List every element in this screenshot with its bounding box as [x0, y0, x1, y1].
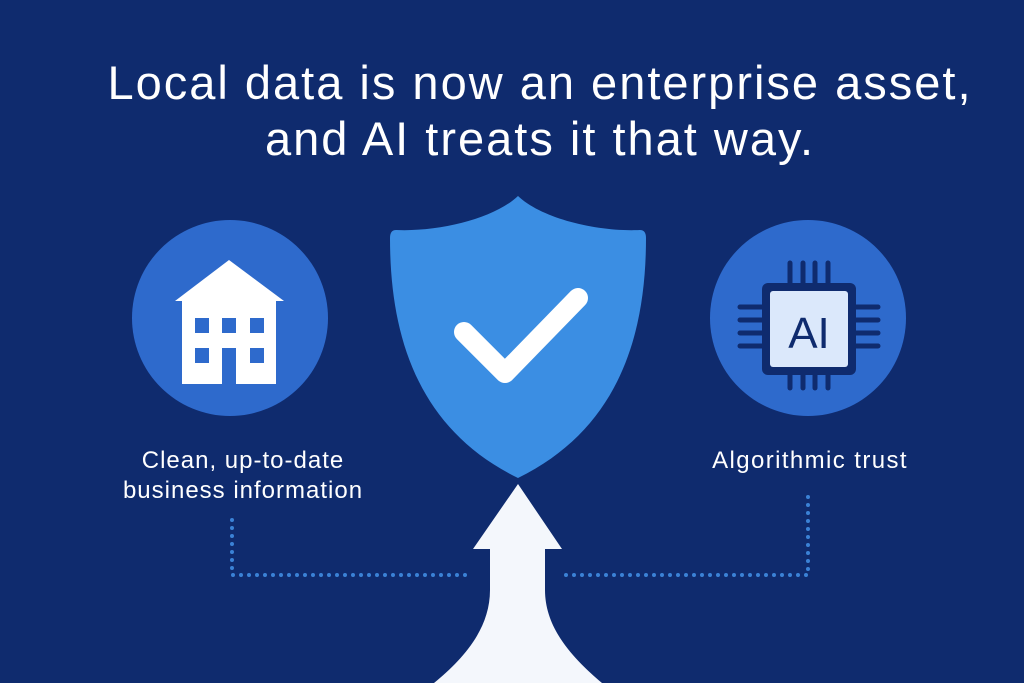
- label: clean business info: business information: [123, 477, 363, 504]
- title: [107, 56, 973, 165]
- dotted connector left: [232, 520, 466, 575]
- icon: shield with checkmark: [390, 196, 646, 478]
- title: Local data is now an enterprise asset,: [107, 56, 973, 109]
- arrow: up: [434, 484, 602, 683]
- label: clean business info: Clean, up-to-date: [142, 447, 344, 474]
- icon: AI chip circle: [710, 220, 906, 416]
- label: algorithmic trust: Algorithmic trust: [712, 447, 908, 474]
- label: clean business info: [123, 447, 363, 504]
- icon: AI chip circle: AI: [788, 309, 830, 358]
- title: and AI treats it that way.: [265, 112, 815, 165]
- icon: building circle: [132, 220, 328, 416]
- dotted connector right: [566, 493, 808, 575]
